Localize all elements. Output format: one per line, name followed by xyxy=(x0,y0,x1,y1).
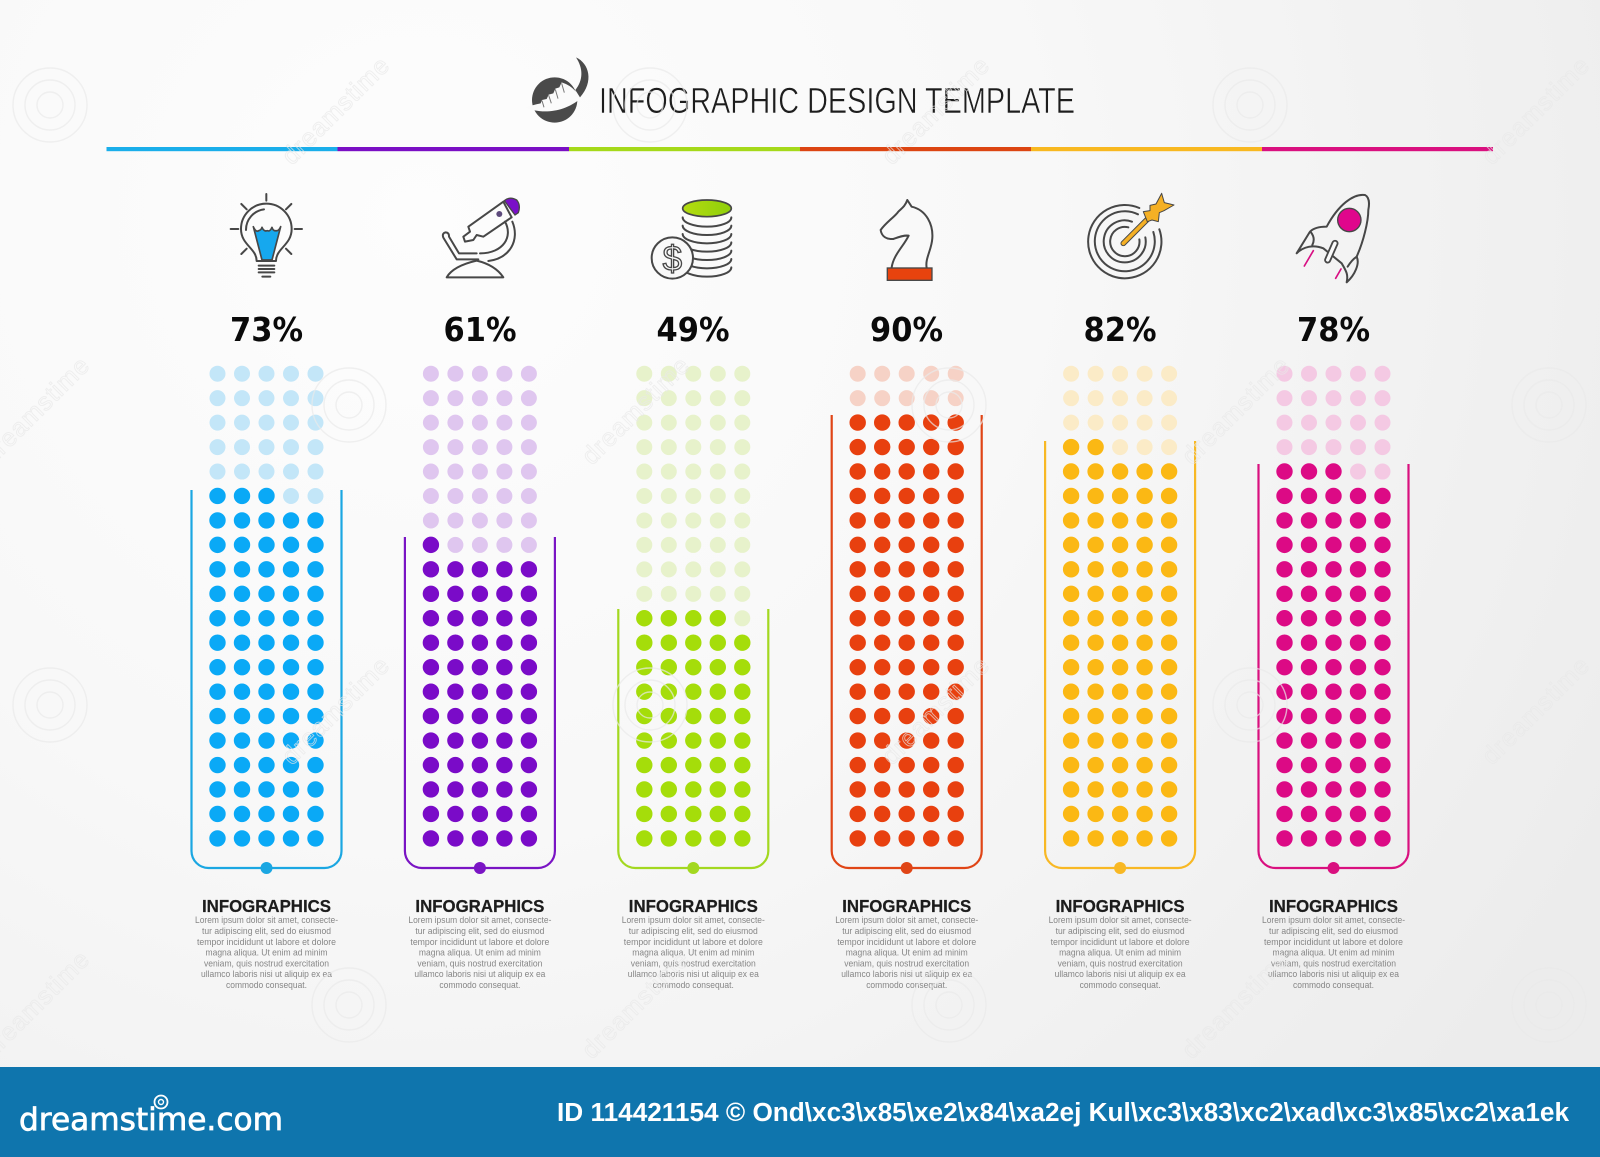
text block: column 5: tur adipiscing elit, sed do eiusmod xyxy=(1056,926,1185,936)
watermark text: dreamstime xyxy=(276,51,396,170)
percent: 82: 82% xyxy=(1084,311,1156,349)
watermark text: dreamstime xyxy=(276,651,396,770)
text block: column 5 xyxy=(1049,896,1192,990)
icon: coins: $ xyxy=(663,239,682,278)
vessel outline xyxy=(832,415,982,868)
text block: column 4: veniam, quis nostrud exercitation xyxy=(844,958,969,968)
text block: column 2: commodo consequat. xyxy=(439,980,520,990)
text block: column 3: Lorem ipsum dolor sit amet, consecte- xyxy=(622,915,765,925)
filled dots xyxy=(218,495,316,838)
text block: column 3: commodo consequat. xyxy=(653,980,734,990)
text block: column 5: ullamco laboris nisi ut aliquip ex ea xyxy=(1055,969,1186,979)
background dots xyxy=(1284,374,1382,840)
watermark text: dreamstime xyxy=(1476,51,1596,170)
filled dots xyxy=(431,544,529,838)
text block: column 3: magna aliqua. Ut enim ad minim xyxy=(632,948,755,958)
vessel outline xyxy=(1258,464,1408,868)
text block: column 2: ullamco laboris nisi ut aliquip ex ea xyxy=(414,969,546,979)
text block: column 1: tempor incididunt ut labore et dolore xyxy=(197,937,336,947)
text block: column 1: magna aliqua. Ut enim ad minim xyxy=(206,948,328,958)
panel: blue dot column 73 xyxy=(192,374,342,874)
text block: column 5: commodo consequat. xyxy=(1080,980,1161,990)
watermark text: dreamstime xyxy=(576,351,696,470)
text block: column 6: veniam, quis nostrud exercitation xyxy=(1271,958,1396,968)
panel: red dot column 90 xyxy=(832,374,982,874)
footer banner xyxy=(0,1067,1600,1157)
text block: column 2 xyxy=(408,896,551,990)
text block: column 5: magna aliqua. Ut enim ad minim xyxy=(1059,948,1181,958)
text block: column 1 xyxy=(195,896,338,990)
text block: column 6: INFOGRAPHICS xyxy=(1269,896,1398,916)
text block: column 5: INFOGRAPHICS xyxy=(1056,896,1185,916)
vessel node xyxy=(901,862,913,874)
vessel node xyxy=(1114,862,1126,874)
footer logo: dreamstime.com xyxy=(19,1102,283,1138)
text block: column 2: Lorem ipsum dolor sit amet, consecte- xyxy=(408,915,551,925)
text block: column 2: magna aliqua. Ut enim ad minim xyxy=(419,948,541,958)
background dots xyxy=(431,374,529,840)
vessel outline xyxy=(1045,441,1195,868)
filled dots xyxy=(1284,471,1382,838)
text block: column 1: veniam, quis nostrud exercitation xyxy=(204,958,329,968)
text block: column 6: commodo consequat. xyxy=(1293,980,1374,990)
text block: column 5: Lorem ipsum dolor sit amet, consecte- xyxy=(1049,915,1192,925)
watermark text: dreamstime xyxy=(1176,351,1296,470)
vessel node xyxy=(687,862,699,874)
text block: column 1: Lorem ipsum dolor sit amet, consecte- xyxy=(195,915,338,925)
rainbow divider xyxy=(106,147,1493,151)
icon: rocket xyxy=(1297,195,1369,282)
text block: column 6: tur adipiscing elit, sed do eiusmod xyxy=(1269,926,1398,936)
percent: 73: 73% xyxy=(230,311,303,349)
text block: column 4: tur adipiscing elit, sed do eiusmod xyxy=(842,926,971,936)
text block: column 3 xyxy=(622,896,765,990)
text block: column 4 xyxy=(835,896,978,990)
text block: column 2: INFOGRAPHICS xyxy=(415,896,544,916)
text block: column 2: tur adipiscing elit, sed do eiusmod xyxy=(415,926,544,936)
text block: column 6: ullamco laboris nisi ut aliquip ex ea xyxy=(1268,969,1400,979)
text block: column 6: magna aliqua. Ut enim ad minim xyxy=(1272,948,1395,958)
vessel node xyxy=(1328,862,1340,874)
icon: microscope xyxy=(443,198,519,277)
percent: 90: 90% xyxy=(870,311,943,349)
icon: target with arrow xyxy=(1088,193,1174,278)
vessel outline xyxy=(192,490,342,868)
text block: column 6: Lorem ipsum dolor sit amet, consecte- xyxy=(1262,915,1405,925)
panel: green dot column 49 xyxy=(618,374,768,874)
logo icon xyxy=(525,57,588,123)
filled dots xyxy=(1071,446,1169,838)
icon: light bulb xyxy=(231,194,302,277)
text block: column 4: ullamco laboris nisi ut aliquip ex ea xyxy=(841,969,973,979)
filled dots xyxy=(644,617,742,838)
text block: column 6 xyxy=(1262,896,1405,990)
text block: column 2: veniam, quis nostrud exercitation xyxy=(417,958,542,968)
background dots xyxy=(1071,374,1169,840)
text block: column 4: tempor incididunt ut labore et dolore xyxy=(837,937,976,947)
text block: column 3: INFOGRAPHICS xyxy=(629,896,758,916)
title: INFOGRAPHIC DESIGN TEMPLATE xyxy=(599,80,1075,121)
percent: 61: 61% xyxy=(444,311,516,349)
panel: purple dot column 61 xyxy=(405,374,555,874)
percent: 78: 78% xyxy=(1297,311,1370,349)
text block: column 3: ullamco laboris nisi ut aliquip ex ea xyxy=(628,969,760,979)
text block: column 1: ullamco laboris nisi ut aliquip ex ea xyxy=(201,969,333,979)
watermark text: dreamstime xyxy=(576,945,696,1064)
text block: column 1: commodo consequat. xyxy=(226,980,307,990)
text block: column 6: tempor incididunt ut labore et dolore xyxy=(1264,937,1403,947)
text block: column 5: veniam, quis nostrud exercitation xyxy=(1058,958,1183,968)
text block: column 3: tur adipiscing elit, sed do eiusmod xyxy=(629,926,758,936)
vessel outline xyxy=(618,609,768,868)
text block: column 4: Lorem ipsum dolor sit amet, consecte- xyxy=(835,915,978,925)
footer credit: ID 114421154 © Ond\xc3\x85\xe2\x84\xa2ej Kul\xc3\x83\xc2\xad\xc3\x85\xc2\xa1ek xyxy=(557,1099,1570,1127)
text block: column 4: INFOGRAPHICS xyxy=(842,896,971,916)
text block: column 3: veniam, quis nostrud exercitation xyxy=(631,958,756,968)
percent: 49: 49% xyxy=(656,311,730,349)
background dots xyxy=(644,374,742,840)
text block: column 1: INFOGRAPHICS xyxy=(202,896,331,916)
icon: coins xyxy=(652,200,731,279)
watermark text: dreamstime xyxy=(876,51,996,170)
background dots xyxy=(858,374,956,840)
filled dots xyxy=(858,422,956,838)
text block: column 4: commodo consequat. xyxy=(866,980,947,990)
vessel outline xyxy=(405,537,555,868)
background dots xyxy=(218,374,316,840)
text block: column 2: tempor incididunt ut labore et dolore xyxy=(410,937,549,947)
vessel node xyxy=(474,862,486,874)
panel: yellow dot column 82 xyxy=(1045,374,1195,874)
watermark text: dreamstime xyxy=(1176,945,1296,1064)
text block: column 3: tempor incididunt ut labore et dolore xyxy=(624,937,763,947)
text block: column 1: tur adipiscing elit, sed do eiusmod xyxy=(202,926,331,936)
panel: magenta dot column 78 xyxy=(1258,374,1408,874)
text block: column 4: magna aliqua. Ut enim ad minim xyxy=(846,948,968,958)
watermark text: dreamstime xyxy=(876,651,996,770)
text block: column 5: tempor incididunt ut labore et dolore xyxy=(1051,937,1190,947)
vessel node xyxy=(260,862,272,874)
watermark text: dreamstime xyxy=(1476,651,1596,770)
icon: chess knight xyxy=(881,200,932,280)
